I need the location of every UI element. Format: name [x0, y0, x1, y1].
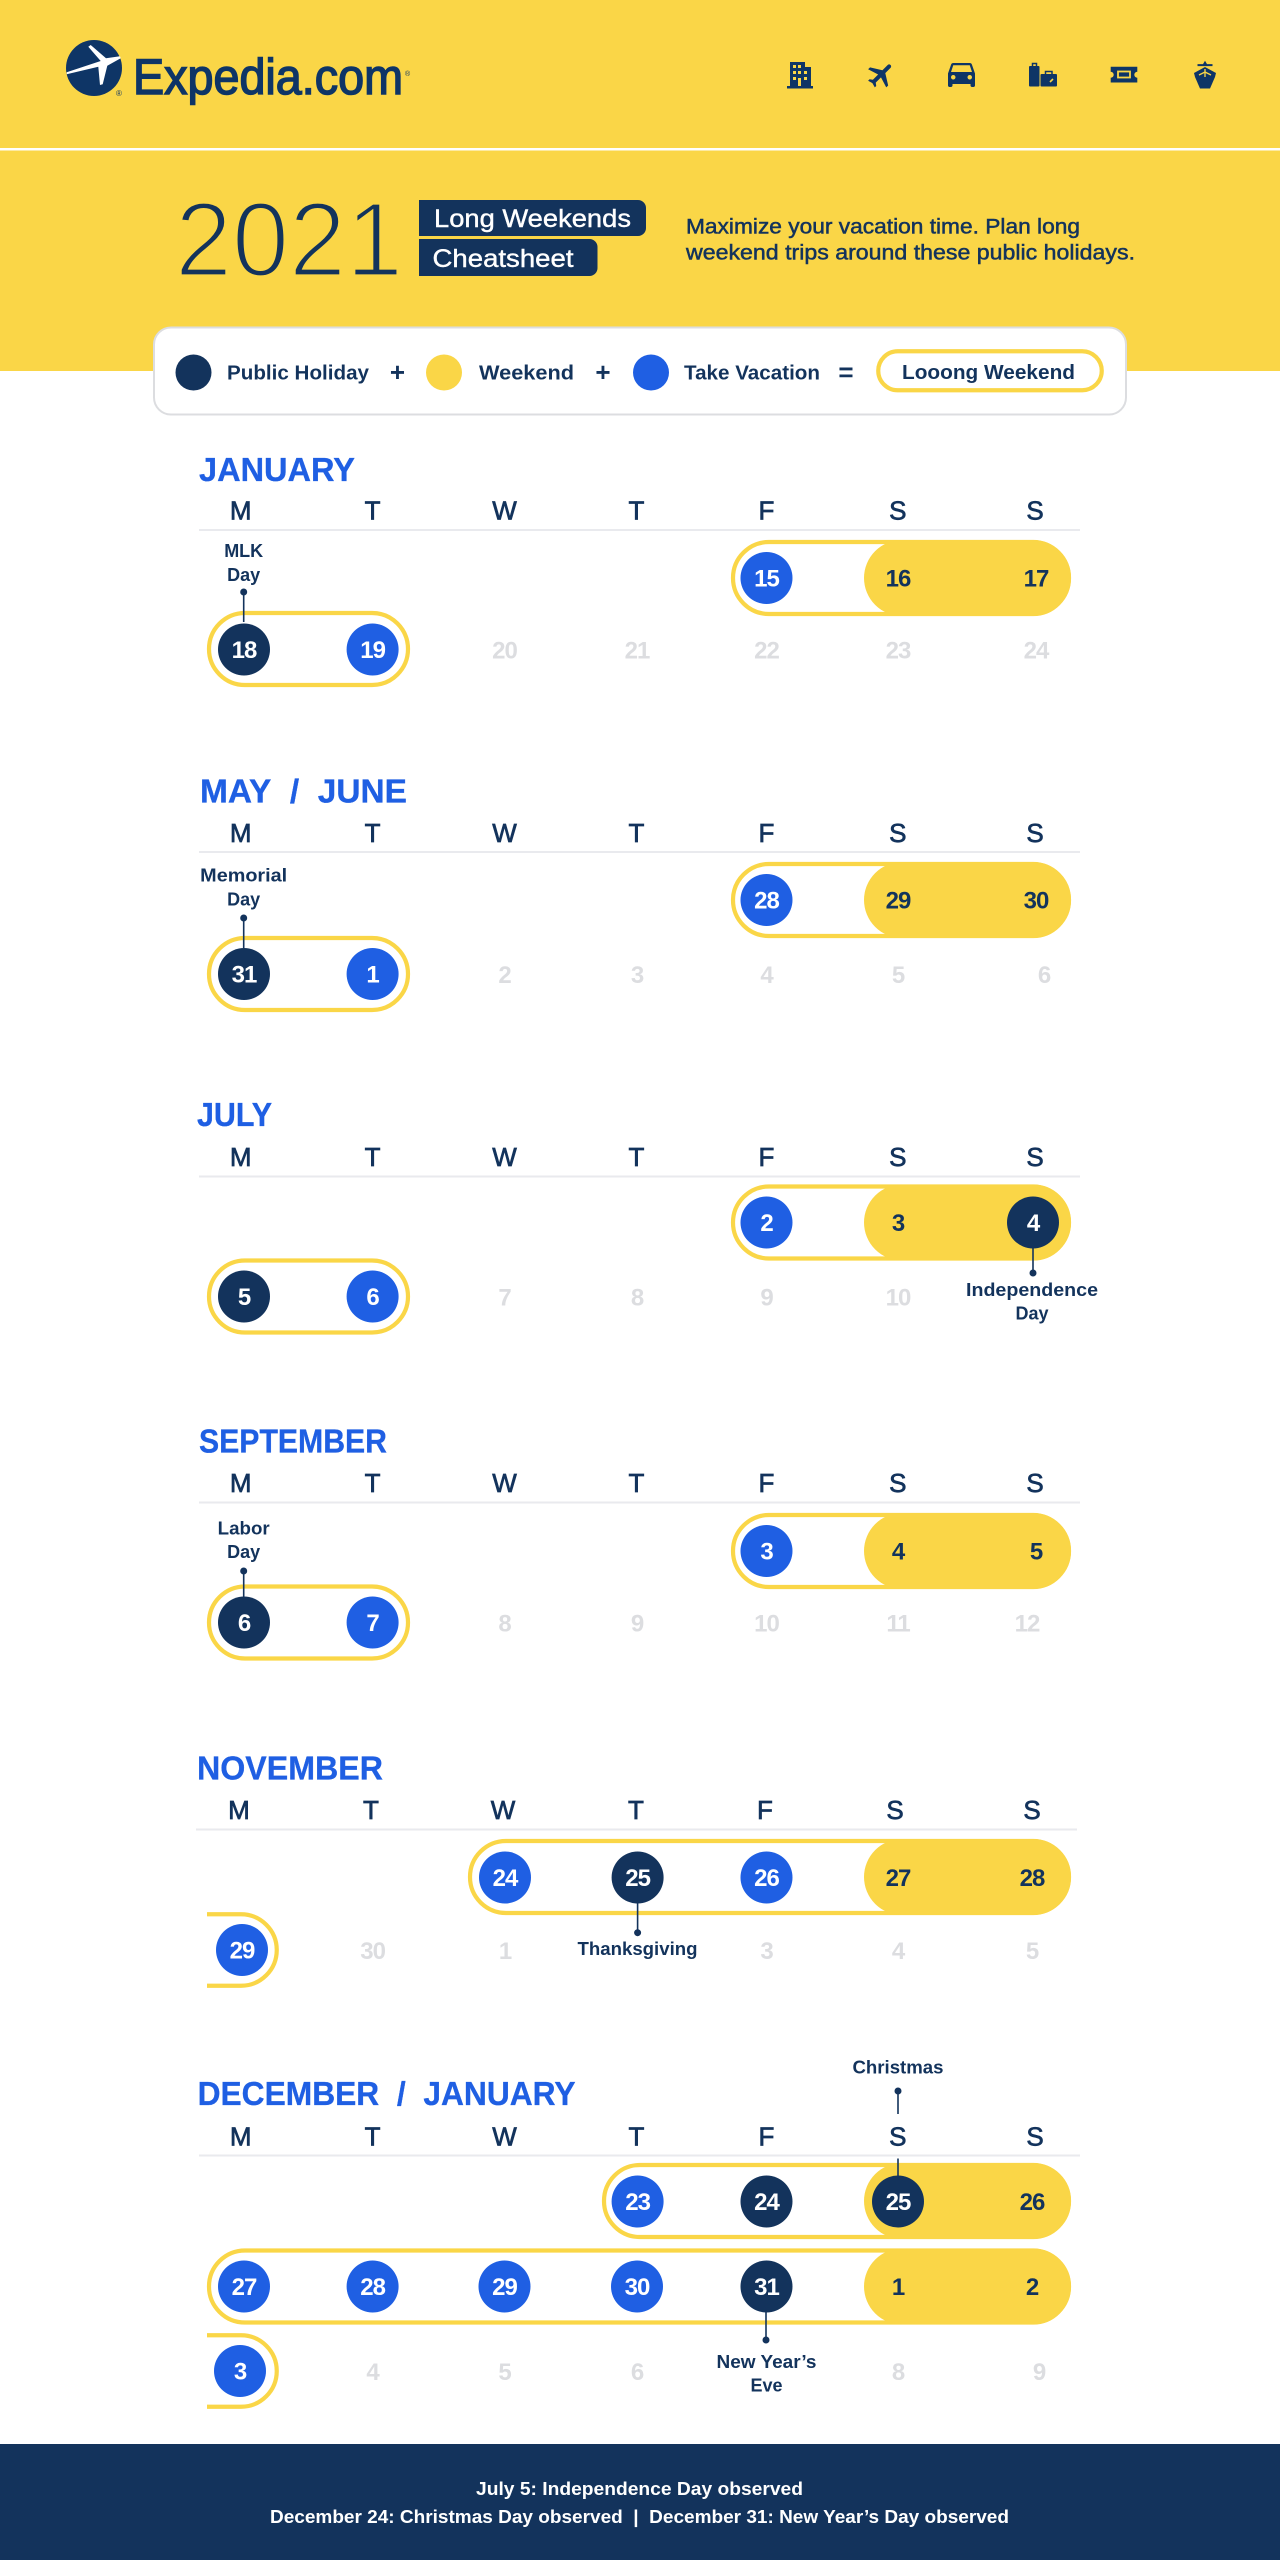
- long weekend pill: Sep 3-5: 5: [1030, 1538, 1043, 1566]
- callout: New Year's Eve: [716, 2312, 816, 2396]
- panel: May / June: [199, 773, 1080, 1010]
- muted dates: 9: [631, 1610, 644, 1638]
- long weekend pill: May 31-Jun 1: 31: [232, 962, 257, 988]
- muted dates: 6: [631, 2359, 644, 2386]
- long weekend pill: Dec 27-Jan 2: 31: [754, 2274, 779, 2301]
- long weekend pill: Dec 23-26: 23: [625, 2189, 651, 2216]
- long weekend continuation: Nov 29: [207, 1914, 277, 1986]
- weekday header: F: [759, 496, 774, 526]
- legend: take vacation: Take Vacation: [684, 362, 820, 384]
- panel: November: [196, 1749, 1077, 1986]
- icon: flight: [862, 56, 900, 93]
- weekday header: F: [759, 1468, 774, 1498]
- long weekend pill: Jul 2-4: 4: [1027, 1210, 1041, 1237]
- weekday header: S: [1026, 818, 1044, 848]
- long weekend pill: Jan 15-17: 16: [886, 566, 911, 592]
- weekday header: M: [230, 2122, 252, 2152]
- icon: ticket: [1111, 67, 1137, 82]
- weekday header: [199, 496, 1080, 531]
- long weekend pill: Jul 5-6: [209, 1260, 408, 1332]
- long weekend pill: Jan 15-17: 15: [754, 566, 779, 592]
- weekday header: T: [628, 818, 644, 848]
- long weekend pill: Jan 15-17: [733, 540, 1071, 616]
- weekday header: T: [365, 2122, 381, 2152]
- weekday header: [199, 1468, 1080, 1504]
- icon: cruise ship: [1194, 61, 1216, 88]
- muted dates: 22: [754, 638, 779, 664]
- weekday header: [199, 2122, 1080, 2156]
- weekday header: F: [759, 1142, 774, 1172]
- legend: weekend: Weekend: [479, 362, 574, 384]
- weekday header: S: [889, 496, 906, 526]
- badge: Long Weekends: Long Weekends: [434, 205, 631, 233]
- callout: New Year's Eve: Eve: [750, 2376, 783, 2396]
- long weekend pill: Dec 27-Jan 2: 2: [1026, 2274, 1039, 2301]
- badge: Long Weekends: [419, 200, 646, 236]
- tagline: weekend trips around these public holidays.: [685, 242, 1135, 264]
- weekday header: M: [230, 1142, 252, 1172]
- long weekend pill: May 28-30: [733, 862, 1071, 938]
- weekday header: T: [628, 496, 644, 526]
- legend: [154, 328, 1126, 414]
- weekday header: S: [1023, 1795, 1041, 1825]
- long weekend pill: Dec 27-Jan 2: 28: [360, 2274, 386, 2301]
- callout: MLK Day: MLK: [224, 541, 263, 561]
- legend: take vacation: [633, 354, 820, 390]
- muted dates: 8: [892, 2359, 905, 2386]
- muted dates: 21: [625, 638, 650, 664]
- muted dates: 3: [631, 962, 644, 989]
- long weekend pill: Dec 27-Jan 2: 30: [625, 2274, 650, 2301]
- callout: Memorial Day: Memorial: [200, 866, 287, 886]
- tagline: Maximize your vacation time. Plan long: [686, 216, 1080, 238]
- muted dates: 9: [1033, 2359, 1046, 2386]
- plus sign: +: [595, 357, 611, 387]
- icon: hotel: [787, 62, 813, 88]
- muted dates: 2: [498, 962, 511, 989]
- callout: Labor Day: [218, 1518, 270, 1597]
- weekday header: S: [889, 1468, 906, 1498]
- long weekend pill: Dec 23-26: 26: [1020, 2189, 1045, 2216]
- weekday header: S: [1026, 1142, 1044, 1172]
- muted dates: 8: [631, 1284, 644, 1312]
- callout: Memorial Day: [200, 866, 287, 948]
- callout: Thanksgiving: Thanksgiving: [578, 1939, 698, 1959]
- long weekend pill: Dec 27-Jan 2: 27: [232, 2274, 257, 2301]
- long weekend pill: May 28-30: 30: [1024, 888, 1049, 914]
- long weekend pill: Sep 6-7: 7: [366, 1610, 379, 1637]
- long weekend pill: Jul 5-6: 5: [238, 1284, 251, 1311]
- weekday header: M: [228, 1795, 250, 1825]
- long weekend pill: May 31-Jun 1: 1: [366, 962, 379, 988]
- weekday header: T: [363, 1795, 379, 1825]
- muted dates: 4: [760, 962, 774, 989]
- muted dates: 24: [1024, 638, 1050, 664]
- panel: September: [199, 1423, 1080, 1658]
- weekday header: M: [230, 818, 252, 848]
- icon: car: [948, 63, 975, 87]
- muted dates: 8: [498, 1610, 511, 1638]
- month heading: JULY: [197, 1096, 272, 1133]
- long weekend pill: Dec 23-26: [604, 2158, 1071, 2239]
- weekday header: S: [889, 2122, 906, 2152]
- weekday header: W: [492, 496, 517, 526]
- long weekend pill: Jan 15-17: 17: [1024, 566, 1049, 592]
- weekday header: F: [757, 1795, 773, 1825]
- muted dates: 4: [366, 2359, 380, 2386]
- muted dates: [360, 1938, 1039, 1965]
- weekday header: S: [1026, 2122, 1044, 2152]
- callout: Independence Day: Day: [1015, 1304, 1049, 1324]
- callout: Christmas label: [852, 2057, 944, 2114]
- legend: weekend: [426, 354, 574, 390]
- muted dates: [498, 1610, 1040, 1638]
- long weekend pill: Dec 23-26: 25: [886, 2189, 911, 2216]
- muted dates: 5: [1026, 1938, 1039, 1965]
- callout: Independence Day: [966, 1248, 1098, 1324]
- callout: Independence Day: Independence: [966, 1280, 1098, 1300]
- plus sign: +: [390, 357, 405, 387]
- long weekend pill: Nov 24-28: 28: [1020, 1865, 1045, 1892]
- callout: Memorial Day: Day: [227, 890, 260, 910]
- panel: July: [197, 1096, 1098, 1332]
- muted dates: [366, 2359, 1046, 2386]
- muted dates: 10: [754, 1610, 779, 1638]
- callout: Labor Day: Labor: [218, 1518, 270, 1538]
- month heading: NOVEMBER: [197, 1749, 383, 1786]
- long weekend pill: Nov 24-28: [470, 1839, 1071, 1915]
- muted dates: 4: [892, 1938, 906, 1965]
- month heading: MAY / JUNE: [200, 773, 407, 810]
- weekday header: S: [1026, 496, 1044, 526]
- Expedia logo: ®: [405, 70, 411, 78]
- weekday header: T: [365, 818, 381, 848]
- long weekend pill: Dec 27-Jan 2: 29: [492, 2274, 517, 2301]
- long weekend continuation: Nov 29: 29: [230, 1938, 255, 1964]
- muted dates: [498, 1284, 911, 1312]
- long weekend pill: Nov 24-28: 24: [493, 1865, 519, 1892]
- weekday header: W: [492, 2122, 517, 2152]
- muted dates: 11: [886, 1610, 910, 1638]
- weekday header: S: [1026, 1468, 1044, 1498]
- legend: public holiday: Public Holiday: [227, 362, 370, 384]
- muted dates: 5: [892, 962, 905, 989]
- weekday header: [199, 1142, 1080, 1178]
- long weekend pill: Jul 2-4: 2: [760, 1210, 773, 1237]
- panel: January: [199, 451, 1080, 685]
- long weekend pill: Jul 5-6: 6: [366, 1284, 379, 1311]
- callout: MLK Day: Day: [227, 565, 260, 585]
- muted dates: 3: [760, 1938, 773, 1965]
- weekday header: W: [492, 1468, 517, 1498]
- long weekend pill: Sep 3-5: [733, 1513, 1071, 1589]
- legend: public holiday: [176, 354, 370, 390]
- weekday header: T: [628, 1795, 644, 1825]
- callout: Labor Day: Day: [227, 1542, 260, 1562]
- month heading: JANUARY: [199, 451, 355, 488]
- equals sign: =: [838, 357, 854, 387]
- muted dates: 7: [498, 1284, 511, 1312]
- long weekend pill: Jan 18-19: 18: [232, 637, 257, 664]
- long weekend pill: Sep 3-5: 4: [892, 1538, 906, 1566]
- long weekend pill: Sep 6-7: [209, 1586, 408, 1658]
- legend: looong weekend: Looong Weekend: [902, 362, 1075, 384]
- long weekend pill: Jan 18-19: 19: [360, 637, 386, 664]
- muted dates: 6: [1038, 962, 1051, 989]
- long weekend pill: Sep 6-7: 6: [238, 1610, 251, 1637]
- weekday header: S: [889, 818, 906, 848]
- weekday header: F: [759, 2122, 774, 2152]
- weekday header: T: [365, 1468, 381, 1498]
- long weekend pill: Dec 27-Jan 2: [209, 2248, 1071, 2324]
- footnote line 2: December 24: Christmas Day observed | December 31: New Year’s Day observed: [270, 2507, 1009, 2527]
- long weekend pill: May 28-30: 29: [886, 888, 911, 914]
- panel: December / January: [198, 2057, 1080, 2407]
- footnote line 1: July 5: Independence Day observed: [476, 2479, 803, 2499]
- icon: luggage: [1029, 64, 1057, 86]
- badge: Cheatsheet: Cheatsheet: [432, 245, 574, 273]
- weekday header: F: [759, 818, 774, 848]
- tagline: [685, 216, 1135, 264]
- long weekend pill: May 28-30: 28: [754, 888, 779, 914]
- title: 2021: 2021: [175, 181, 403, 299]
- long weekend pill: Nov 24-28: 25: [625, 1865, 651, 1892]
- callout: MLK Day: [224, 541, 263, 622]
- long weekend pill: May 31-Jun 1: [209, 938, 408, 1010]
- long weekend pill: Jul 2-4: [733, 1184, 1071, 1260]
- long weekend continuation: Jan 3: 3: [234, 2358, 247, 2386]
- weekday header: S: [886, 1795, 904, 1825]
- month heading: SEPTEMBER: [199, 1423, 387, 1460]
- callout: Christmas label: Christmas: [852, 2057, 944, 2077]
- weekday header: T: [628, 1142, 644, 1172]
- Expedia logo: Expedia.com: [133, 49, 403, 105]
- weekday header: M: [230, 1468, 252, 1498]
- long weekend continuation: Jan 3: [207, 2335, 277, 2407]
- long weekend pill: Jul 2-4: 3: [892, 1210, 905, 1237]
- Expedia logo: [66, 40, 411, 105]
- long weekend pill: Dec 23-26: 24: [754, 2189, 780, 2216]
- badge: Cheatsheet: [419, 239, 598, 276]
- muted dates: 10: [886, 1284, 911, 1312]
- yellow header background: [0, 0, 1280, 371]
- weekday header: W: [491, 1795, 516, 1825]
- muted dates: 30: [360, 1938, 386, 1965]
- weekday header: S: [889, 1142, 906, 1172]
- muted dates: 1: [499, 1938, 512, 1965]
- callout: New Year's Eve: New Year’s: [716, 2352, 816, 2372]
- weekday header: T: [628, 2122, 644, 2152]
- long weekend pill: Nov 24-28: 27: [886, 1865, 911, 1892]
- long weekend pill: Nov 24-28: 26: [754, 1865, 779, 1892]
- long weekend pill: Jan 18-19: [209, 613, 408, 685]
- muted dates: 5: [498, 2359, 511, 2386]
- muted dates: 23: [886, 638, 911, 664]
- weekday header: T: [628, 1468, 644, 1498]
- Expedia logo: ®: [116, 89, 122, 98]
- weekday header: T: [365, 496, 381, 526]
- weekday header: W: [492, 818, 517, 848]
- weekday header: [196, 1795, 1077, 1830]
- weekday header: T: [365, 1142, 381, 1172]
- muted dates: 12: [1015, 1610, 1040, 1638]
- weekday header: W: [492, 1142, 517, 1172]
- footer: [0, 2444, 1280, 2560]
- muted dates: 9: [760, 1284, 773, 1312]
- legend: looong weekend: [878, 351, 1102, 390]
- weekday header: M: [230, 496, 252, 526]
- long weekend pill: Sep 3-5: 3: [760, 1538, 773, 1566]
- muted dates: 20: [492, 638, 517, 664]
- callout: Thanksgiving: [578, 1903, 698, 1959]
- muted dates: [492, 638, 1050, 664]
- long weekend pill: Dec 27-Jan 2: 1: [892, 2274, 905, 2301]
- muted dates: [498, 962, 1051, 989]
- month heading: DECEMBER / JANUARY: [198, 2075, 576, 2112]
- weekday header: [199, 818, 1080, 853]
